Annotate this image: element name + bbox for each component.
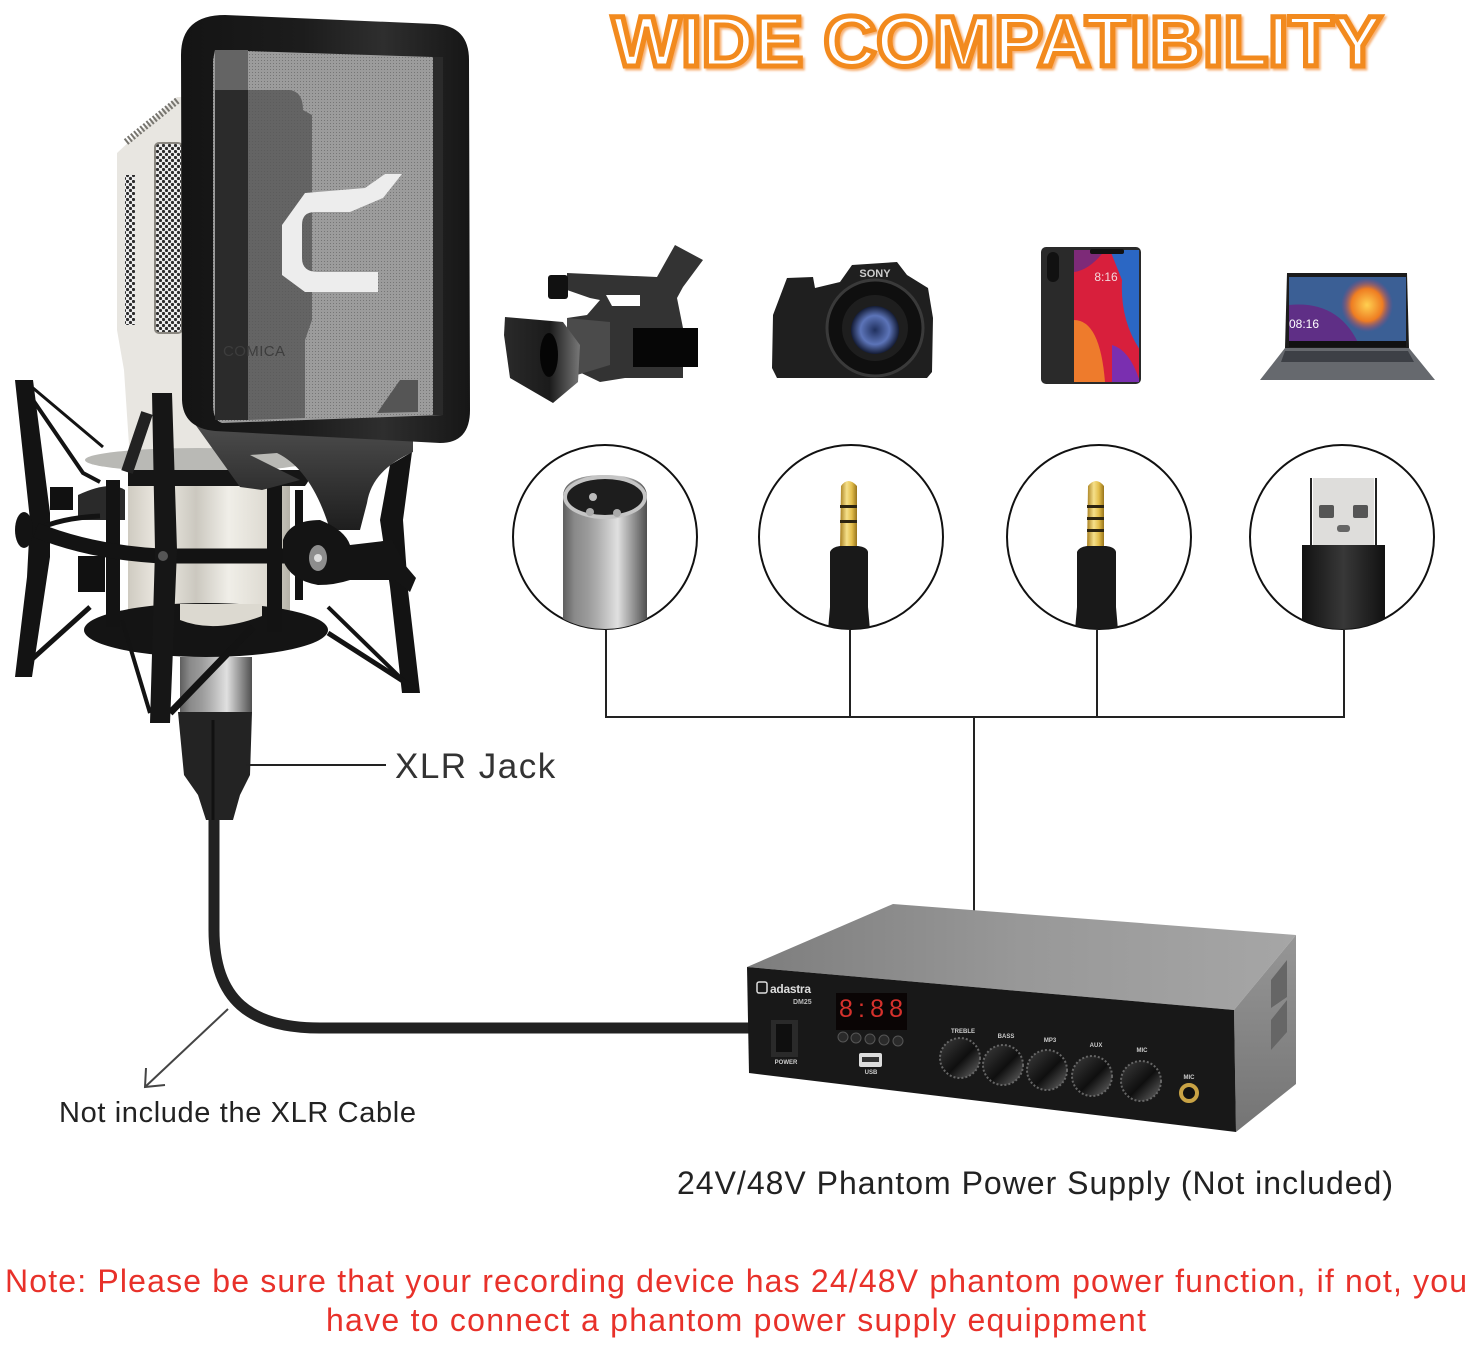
icon: laptop: 08:16 [1289, 317, 1319, 331]
phantom power supply [747, 904, 1296, 1132]
pop filter arm [187, 405, 413, 530]
brand logo [282, 174, 402, 292]
pop filter mesh [213, 50, 443, 423]
pop filter frame [181, 15, 470, 443]
knob labels: AUX [1090, 1043, 1102, 1049]
icon: photo camera [772, 262, 933, 378]
knob labels: MIC [1136, 1048, 1148, 1054]
USB port [859, 1053, 882, 1076]
title: WIDE COMPATIBILITY [612, 3, 1382, 82]
LED display [836, 993, 907, 1030]
media buttons [838, 1032, 903, 1046]
microphone with pop filter and shock mount [15, 15, 470, 820]
brand text: DM25 [793, 999, 812, 1006]
power supply top [747, 904, 1296, 1010]
connector: XLR plug [513, 445, 697, 640]
knob labels [951, 1029, 1195, 1081]
icon: smartphone [1041, 247, 1141, 384]
note: Note: Please be sure that your recording device has 24/48V phantom power function, if not, you [5, 1263, 1467, 1299]
label: XLR Jack: XLR Jack [395, 747, 557, 786]
label: cable note: Not include the XLR Cable [59, 1097, 416, 1129]
connection lines [606, 630, 1344, 924]
side vents [1271, 960, 1287, 1050]
brand text [757, 982, 812, 1006]
XLR cable [214, 820, 750, 1028]
arrow: to XLR cable note [145, 1009, 228, 1087]
mic input [1181, 1085, 1197, 1101]
label: power supply: 24V/48V Phantom Power Supply (Not included) [677, 1165, 1393, 1201]
LED display: 8:88 [839, 995, 903, 1023]
icon: smartphone: 8:16 [1094, 270, 1118, 284]
power supply front panel [747, 967, 1236, 1132]
brand text: adastra [770, 982, 811, 996]
knob labels: TREBLE [951, 1029, 975, 1035]
XLR Jack leader line [246, 764, 386, 766]
connector: USB plug [1250, 445, 1434, 635]
power switch [771, 1020, 798, 1066]
connector: 3.5mm TRS plug [759, 445, 943, 630]
note [5, 1263, 1467, 1338]
icon: photo camera: SONY [859, 268, 891, 280]
shock mount [15, 380, 420, 723]
icon: video camera [504, 245, 703, 403]
knob labels: MIC [1184, 1075, 1195, 1081]
power supply side [1234, 935, 1296, 1132]
shock mount knob [283, 520, 416, 592]
note: have to connect a phantom power supply equippment [326, 1302, 1146, 1338]
brand name on mesh: COMICA [223, 343, 285, 360]
knob labels: BASS [998, 1034, 1014, 1040]
USB port: USB [865, 1070, 878, 1076]
knob labels: MP3 [1044, 1038, 1057, 1044]
icon: laptop [1260, 273, 1435, 380]
connector: 3.5mm TRRS plug [1007, 445, 1191, 630]
power switch: POWER [775, 1060, 798, 1066]
knobs [940, 1038, 1161, 1101]
microphone body [117, 97, 290, 820]
